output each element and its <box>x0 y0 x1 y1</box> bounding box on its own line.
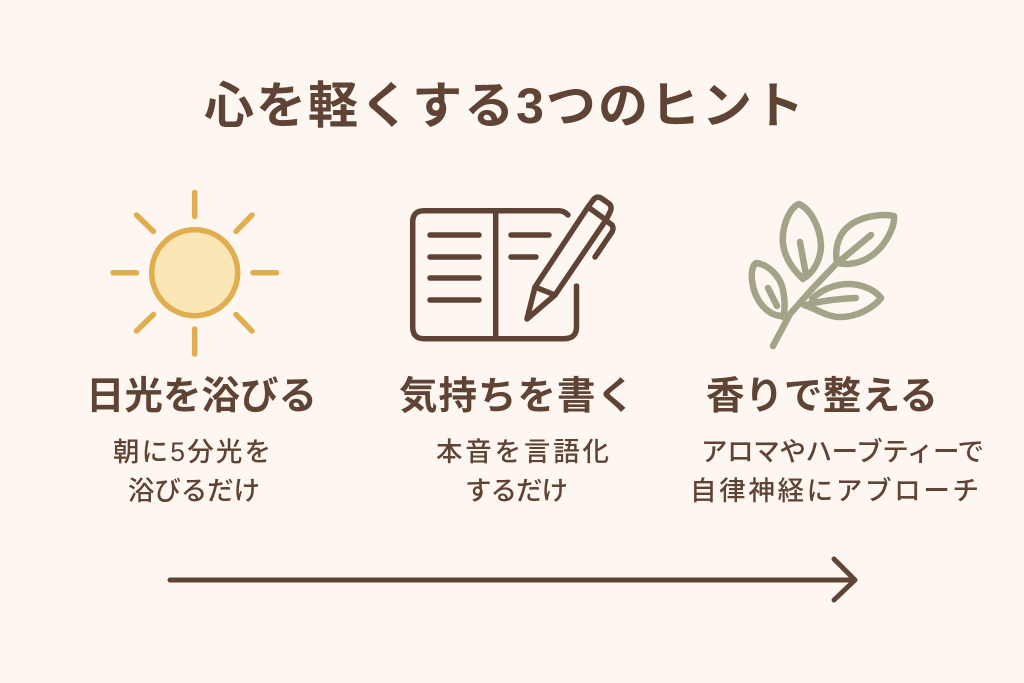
text: writing line 2: するだけ <box>465 476 568 506</box>
text: scent line 1: アロマやハーブティーで <box>701 437 984 467</box>
icon: herb sprig <box>752 204 894 346</box>
icon: notebook and pen <box>413 197 613 339</box>
heading: scent: 香りで整える <box>706 375 938 418</box>
icon: sun <box>113 192 276 354</box>
title: 心を軽くする3つのヒント <box>204 78 804 134</box>
heading: writing: 気持ちを書く <box>399 375 635 418</box>
text: sunlight line 1: 朝に5分光を <box>113 437 271 467</box>
text: scent line 2: 自律神経にアブローチ <box>690 476 979 506</box>
text: sunlight line 2: 浴びるだけ <box>128 476 260 506</box>
text: writing line 1: 本音を言語化 <box>436 437 609 467</box>
heading: sunlight: 日光を浴びる <box>86 375 317 418</box>
arrow <box>170 559 855 600</box>
